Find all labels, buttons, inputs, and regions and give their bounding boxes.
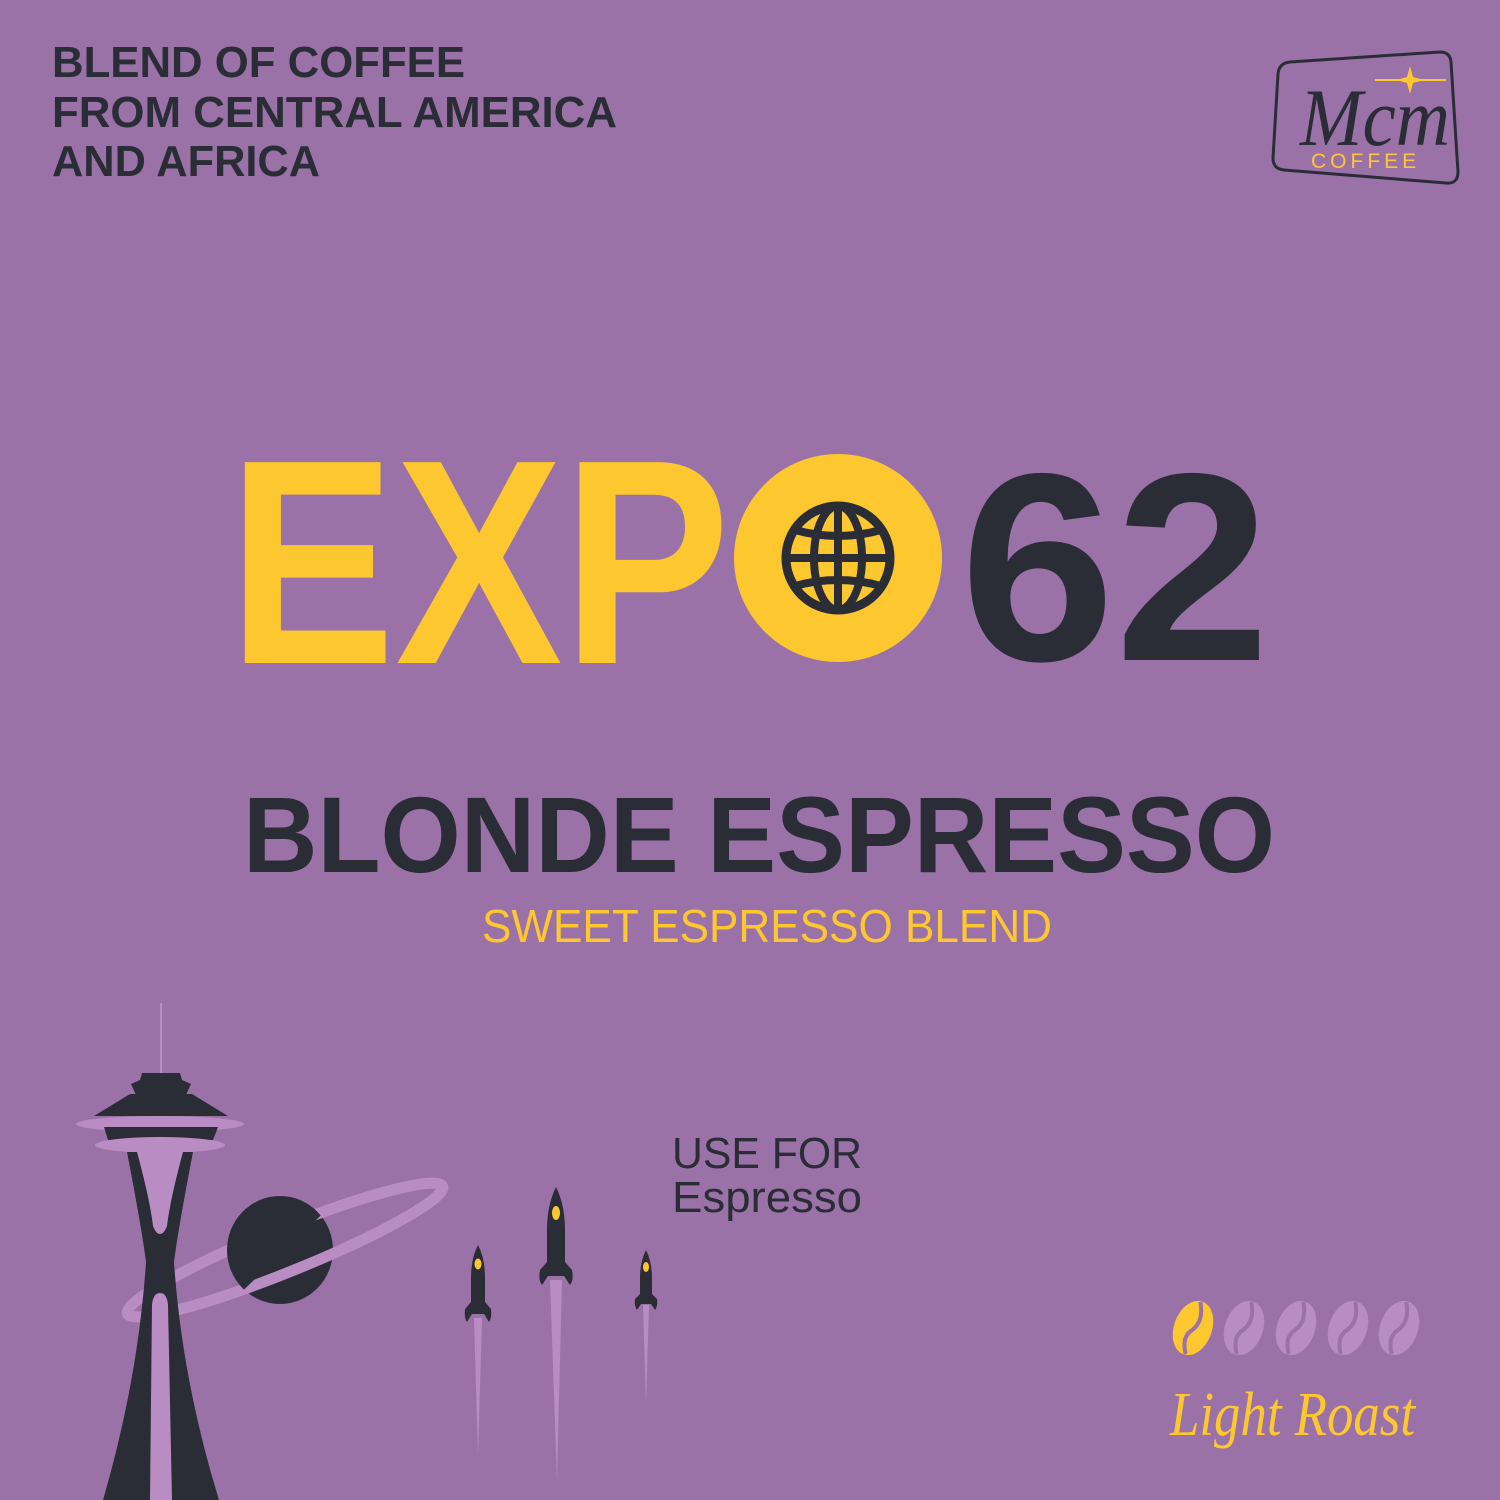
illustration: planet with ring <box>122 1178 448 1322</box>
subheading: SWEET ESPRESSO BLEND <box>482 900 1052 952</box>
logo: Mcm coffee: COFFEE <box>1311 150 1420 173</box>
title: EXPO62 <box>228 399 1270 725</box>
origin text block: BLEND OF COFFEE <box>52 38 465 87</box>
heading: BLONDE ESPRESSO: BLONDE ESPRESSO <box>243 774 1275 895</box>
icon: globe in O <box>734 454 942 662</box>
use for text <box>672 1129 862 1222</box>
title: EXPO62: 62 <box>960 417 1270 717</box>
roast label: Light Roast <box>1169 1381 1416 1449</box>
illustration: space needle <box>76 1003 244 1500</box>
logo: Mcm coffee <box>1273 52 1458 183</box>
roast level beans <box>1166 1295 1426 1361</box>
use for text: Espresso <box>672 1173 862 1222</box>
origin text block: FROM CENTRAL AMERICA <box>52 88 617 137</box>
origin text block: AND AFRICA <box>52 137 320 186</box>
rocket center <box>539 1187 573 1480</box>
illustration: rockets <box>465 1187 657 1480</box>
title: EXPO62: EXP <box>228 399 730 725</box>
rocket right <box>635 1250 657 1405</box>
logo: Mcm coffee: Mcm <box>1299 72 1450 163</box>
rocket left <box>465 1245 491 1455</box>
use for text: USE FOR <box>672 1129 862 1178</box>
origin text block <box>52 38 617 186</box>
